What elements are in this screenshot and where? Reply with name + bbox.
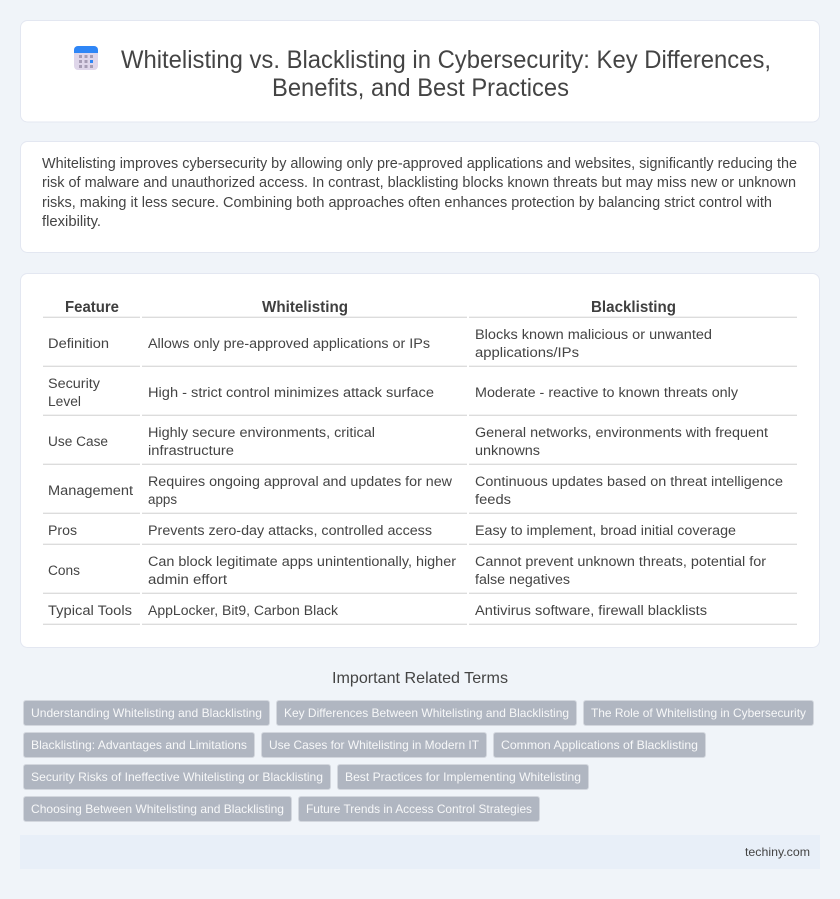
row: cons: admin effort — [148, 572, 227, 588]
row: definition: Blocks known malicious or unwanted — [475, 327, 712, 343]
intro text — [42, 156, 797, 230]
panel: introduction — [20, 142, 820, 252]
intro text: flexibility. — [42, 214, 101, 230]
related term tags: The Role of Whitelisting in Cybersecurity — [591, 706, 806, 720]
heading: important related terms: Important Related Terms — [332, 670, 508, 687]
row: pros — [48, 523, 736, 539]
panel: comparison table — [20, 274, 820, 648]
icon: calendar — [74, 46, 98, 70]
related term tags: Use Cases for Whitelisting in Modern IT — [269, 738, 480, 752]
table header — [65, 299, 676, 316]
row: definition: Allows only pre-approved applications or IPs — [148, 336, 430, 352]
row: cons: false negatives — [475, 572, 570, 588]
row: security level: Security — [48, 376, 101, 392]
footer: techiny.com — [745, 845, 810, 859]
title: Benefits, and Best Practices — [272, 74, 569, 102]
row: cons: Cannot prevent unknown threats, potential for — [475, 554, 766, 570]
row: security level: Moderate - reactive to known threats only — [475, 385, 739, 401]
row: management: Requires ongoing approval and updates for new — [148, 474, 453, 490]
title — [121, 46, 771, 102]
row: security level: Level — [48, 394, 81, 410]
intro text: risks, making it less secure. Combining both approaches often enhances protection by balancing strict control with — [42, 195, 772, 211]
related term tags: Blacklisting: Advantages and Limitations — [31, 738, 247, 752]
row: typical tools: Antivirus software, firewall blacklists — [475, 603, 707, 619]
row: typical tools: Typical Tools — [48, 603, 132, 619]
row: definition: applications/IPs — [475, 345, 579, 361]
row: typical tools: AppLocker, Bit9, Carbon Black — [148, 603, 339, 619]
row: typical tools — [48, 603, 707, 619]
row: pros: Pros — [48, 523, 77, 539]
related term tags: Choosing Between Whitelisting and Blacklisting — [31, 802, 284, 816]
row: cons: Cons — [48, 563, 80, 579]
related term tags: Key Differences Between Whitelisting and Blacklisting — [284, 706, 569, 720]
row: management: Continuous updates based on threat intelligence — [475, 474, 783, 490]
row: cons: Can block legitimate apps unintentionally, higher — [148, 554, 456, 570]
table header: Blacklisting — [591, 299, 676, 316]
row: use case: Highly secure environments, critical — [148, 425, 375, 441]
related term tags: Understanding Whitelisting and Blacklisting — [31, 706, 262, 720]
title: Whitelisting vs. Blacklisting in Cybersecurity: Key Differences, — [121, 46, 771, 74]
row: use case: Use Case — [48, 434, 108, 450]
intro text: Whitelisting improves cybersecurity by allowing only pre-approved applications and websites, significantly reducing the — [42, 156, 797, 172]
row: pros: Easy to implement, broad initial coverage — [475, 523, 736, 539]
row: definition — [48, 327, 712, 361]
row: use case — [48, 425, 768, 459]
row: management: Management — [48, 483, 133, 499]
row: cons — [48, 554, 766, 588]
row: use case: General networks, environments with frequent — [475, 425, 768, 441]
related term tags: Best Practices for Implementing Whitelisting — [345, 770, 581, 784]
footer — [20, 835, 820, 869]
row: management — [48, 474, 783, 508]
row: management: apps — [148, 492, 177, 508]
row: use case: infrastructure — [148, 443, 234, 459]
intro text: risk of malware and unauthorized access. In contrast, blacklisting blocks known threats but may miss new or unknown — [42, 175, 796, 191]
row: use case: unknowns — [475, 443, 540, 459]
table header: Whitelisting — [262, 299, 348, 316]
row: security level: High - strict control minimizes attack surface — [148, 385, 434, 401]
row: security level — [48, 376, 739, 410]
table header: Feature — [65, 299, 119, 316]
related term tags: Common Applications of Blacklisting — [501, 738, 698, 752]
row: management: feeds — [475, 492, 511, 508]
related term tags — [24, 700, 814, 822]
row: definition: Definition — [48, 336, 109, 352]
panel: title header — [20, 20, 820, 122]
related term tags: Security Risks of Ineffective Whitelisting or Blacklisting — [31, 770, 323, 784]
row: pros: Prevents zero-day attacks, controlled access — [148, 523, 432, 539]
related term tags: Future Trends in Access Control Strategies — [306, 802, 532, 816]
